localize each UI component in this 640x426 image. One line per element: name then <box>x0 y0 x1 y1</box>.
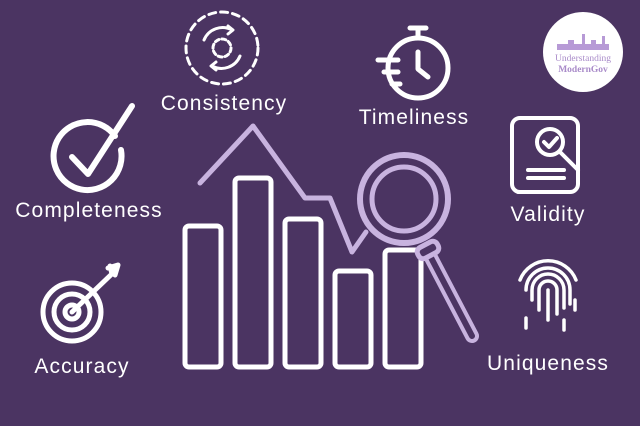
chart: trend line <box>200 126 366 252</box>
label: Timeliness: Timeliness <box>359 106 469 129</box>
icon: scroll <box>512 118 578 192</box>
logo: ModernGov <box>558 65 608 75</box>
icon: fingerprint <box>520 261 576 330</box>
icon: consistency <box>186 12 258 84</box>
icon: magnifier <box>360 155 472 336</box>
chart: bar chart <box>185 178 421 367</box>
label: Accuracy: Accuracy <box>34 355 130 378</box>
label: Uniqueness: Uniqueness <box>487 352 609 375</box>
icon: target <box>43 265 118 341</box>
logo <box>543 12 623 92</box>
label: Completeness: Completeness <box>15 199 163 222</box>
logo: Understanding <box>555 54 611 64</box>
label: Validity: Validity <box>511 203 585 226</box>
icon: checkmark <box>54 106 132 190</box>
label: Consistency: Consistency <box>161 92 287 115</box>
icon: stopwatch <box>378 28 448 98</box>
